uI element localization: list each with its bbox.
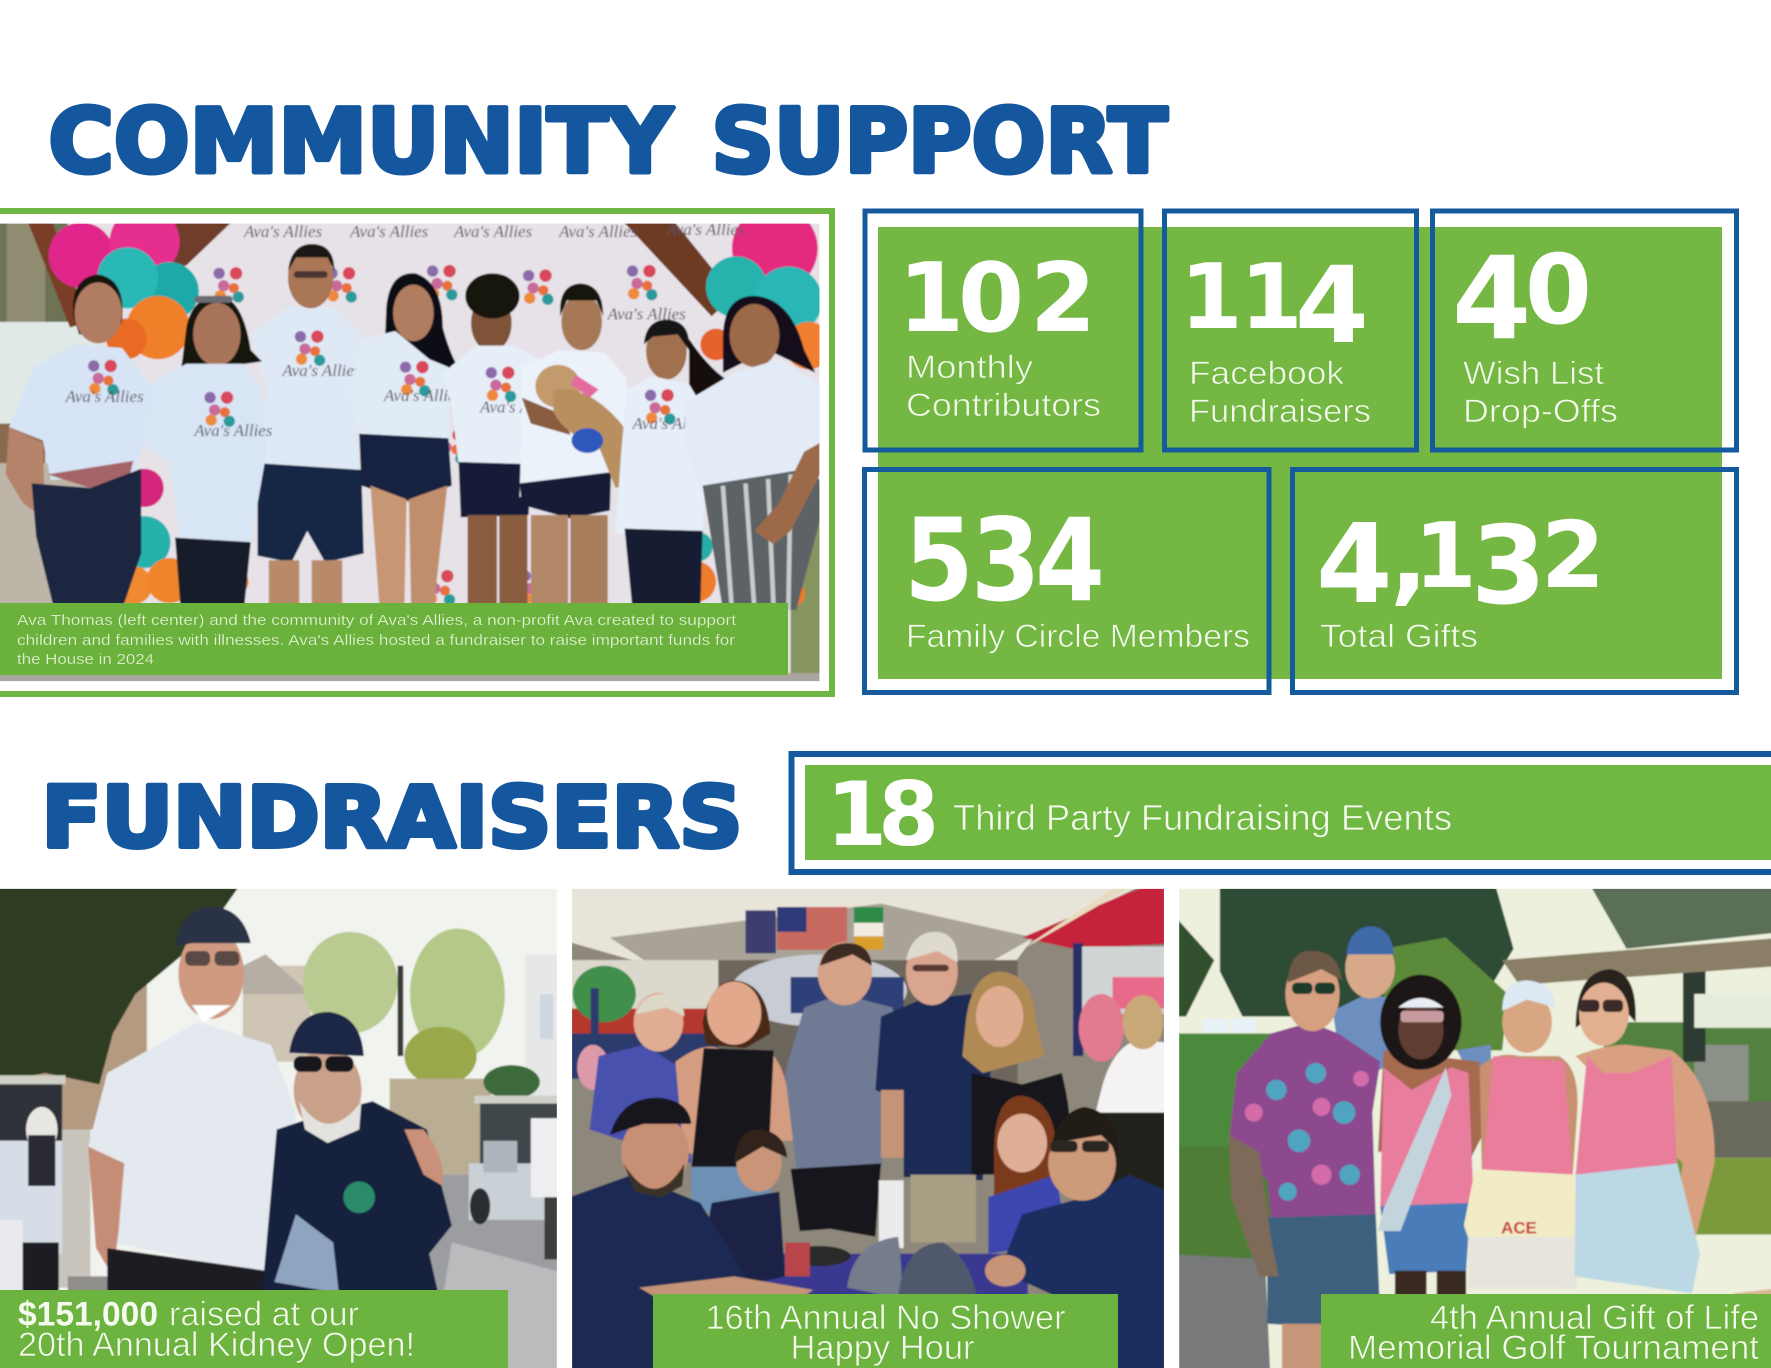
banner number: 18	[826, 763, 939, 866]
banner fill	[805, 765, 1771, 860]
panel: statistics	[864, 211, 1736, 692]
man right	[1006, 1174, 1164, 1368]
stat: 40 wish list drop-offs: 4	[1452, 232, 1531, 365]
man plaid	[785, 994, 901, 1169]
photo: golfers in pink	[1163, 870, 1771, 1368]
person 1	[73, 274, 123, 334]
girl	[706, 1192, 785, 1288]
stat: 40 wish list drop-offs	[1432, 211, 1736, 450]
photo: Ava's Allies group: Ava's Allies	[383, 386, 463, 405]
photo: Ava's Allies group: Ava's Allies	[281, 361, 361, 380]
backdrop branding: Ava's Allies	[243, 222, 322, 241]
caption box	[1321, 1294, 1771, 1368]
woman right	[1576, 1045, 1715, 1242]
woman blue back	[590, 1045, 691, 1163]
table	[763, 1252, 1028, 1294]
stat: 534 family circle members: Family Circle Members	[906, 618, 1250, 654]
caption text	[1348, 1299, 1760, 1367]
man with cap	[1333, 995, 1390, 1070]
stat: 4,132 total gifts: 1	[1414, 504, 1477, 609]
stat: 102 monthly contributors: Monthly	[906, 349, 1033, 385]
person 6 with dog	[561, 294, 602, 350]
photo: two men at golf outing	[0, 870, 587, 1368]
photo: Ava's Allies group: Ava's Allies	[665, 220, 745, 239]
stat: 40 wish list drop-offs: Wish List	[1463, 355, 1604, 391]
green stats background	[878, 227, 1722, 679]
caption text: Memorial Golf Tournament	[1348, 1329, 1760, 1367]
banner frame	[792, 754, 1771, 872]
title: community support: SUPPORT	[712, 90, 1168, 193]
photo: Ava's Allies group: Ava's Allies	[479, 397, 559, 416]
stat: 102 monthly contributors: Contributors	[906, 387, 1101, 423]
person 5	[470, 310, 512, 346]
photo: Ava's Allies group: Ava's Allies	[632, 414, 711, 433]
stat: 4,132 total gifts: ,	[1390, 499, 1428, 616]
caption text	[18, 1296, 415, 1364]
stat: 114 facebook fundraisers: Fundraisers	[1189, 393, 1371, 429]
green photo frame	[0, 211, 832, 694]
stat: 114 facebook fundraisers: Facebook	[1189, 355, 1345, 391]
red tent and crowd	[1022, 888, 1164, 950]
right cart	[474, 1096, 576, 1104]
caption text	[17, 612, 737, 668]
photo: Ava's Allies group: Ava's Allies	[558, 222, 638, 241]
man left	[572, 1176, 744, 1368]
caption box	[653, 1294, 1118, 1368]
heading: fundraisers: FUNDRAISERS	[42, 768, 742, 866]
woman tank	[675, 1047, 793, 1169]
woman glasses	[971, 1073, 1069, 1175]
man navy tee	[875, 994, 992, 1180]
photo: Ava's Allies group: Ava's Allies	[193, 421, 273, 440]
stat: 534 family circle members	[864, 470, 1269, 692]
short man	[262, 1101, 452, 1293]
caption box	[0, 603, 788, 675]
seated woman	[994, 1096, 1056, 1197]
caption box	[0, 1290, 508, 1368]
banner: third party fundraising events	[792, 754, 1771, 872]
title: community support	[48, 90, 1168, 193]
caption text: Happy Hour	[790, 1329, 974, 1367]
title: community support: COMMUNITY	[48, 90, 674, 193]
balloons right	[731, 224, 819, 276]
stat: 4,132 total gifts	[1292, 470, 1736, 692]
panel: No Shower Happy Hour photo	[553, 870, 1186, 1368]
caption text: 4th Annual Gift of Life	[1430, 1299, 1759, 1337]
stat: 4,132 total gifts: 4	[1316, 500, 1393, 628]
photo: Ava's Allies group	[0, 224, 820, 682]
person 8	[723, 296, 815, 373]
flags	[777, 907, 847, 950]
woman visor	[1480, 1055, 1578, 1180]
stat: 114 facebook fundraisers: 4	[1295, 244, 1369, 367]
stat: 4,132 total gifts: 3	[1471, 504, 1546, 629]
caption text	[706, 1299, 1066, 1367]
person 4	[384, 272, 456, 369]
photo: golfers in pink: ACE	[1501, 1218, 1537, 1237]
stat: 102 monthly contributors: 102	[898, 244, 1096, 354]
caption text: the House in 2024	[17, 651, 154, 668]
panel: Kidney Open photo	[0, 870, 587, 1368]
stat: 114 facebook fundraisers	[1164, 211, 1416, 450]
person 2	[180, 300, 262, 367]
photo: Ava's Allies group: Ava's Allies	[607, 305, 686, 324]
photo: group at bar	[553, 870, 1186, 1368]
panel: Gift of Life golf tournament photo	[1163, 870, 1771, 1368]
photo: Ava's Allies group: Ava's Allies	[65, 387, 144, 406]
man floral	[1229, 1022, 1380, 1220]
stat: 534 family circle members: 534	[904, 495, 1105, 628]
person 7	[688, 338, 726, 396]
caption text: children and families with illnesses. Ava's Allies hosted a fundraiser to raise important funds for	[17, 632, 735, 649]
person 3	[251, 307, 364, 474]
caption text: 20th Annual Kidney Open!	[18, 1326, 415, 1364]
panel: group photo with caption	[0, 203, 847, 700]
banner label: Third Party Fundraising Events	[953, 797, 1452, 838]
stat: 4,132 total gifts: 2	[1541, 502, 1605, 609]
caption text: 16th Annual No Shower	[706, 1299, 1066, 1337]
stat: 102 monthly contributors	[865, 211, 1141, 450]
photo: Ava's Allies group: Ava's Allies	[349, 222, 429, 241]
tall man	[88, 1022, 296, 1274]
caption text: Ava Thomas (left center) and the community of Ava's Allies, a non-profit Ava created to support	[17, 612, 737, 629]
stat: 4,132 total gifts: Total Gifts	[1320, 618, 1478, 654]
caption text: raised at our	[169, 1296, 359, 1334]
balloons left	[49, 223, 114, 288]
stat: 40 wish list drop-offs: 0	[1525, 234, 1592, 346]
caption text: $151,000	[18, 1296, 158, 1334]
stat: 114 facebook fundraisers: 11	[1180, 245, 1303, 350]
photo: Ava's Allies group: Ava's Allies	[453, 222, 533, 241]
stat: 40 wish list drop-offs: Drop-Offs	[1463, 393, 1618, 429]
woman black hair	[1378, 1050, 1485, 1163]
left cart	[0, 1075, 66, 1084]
